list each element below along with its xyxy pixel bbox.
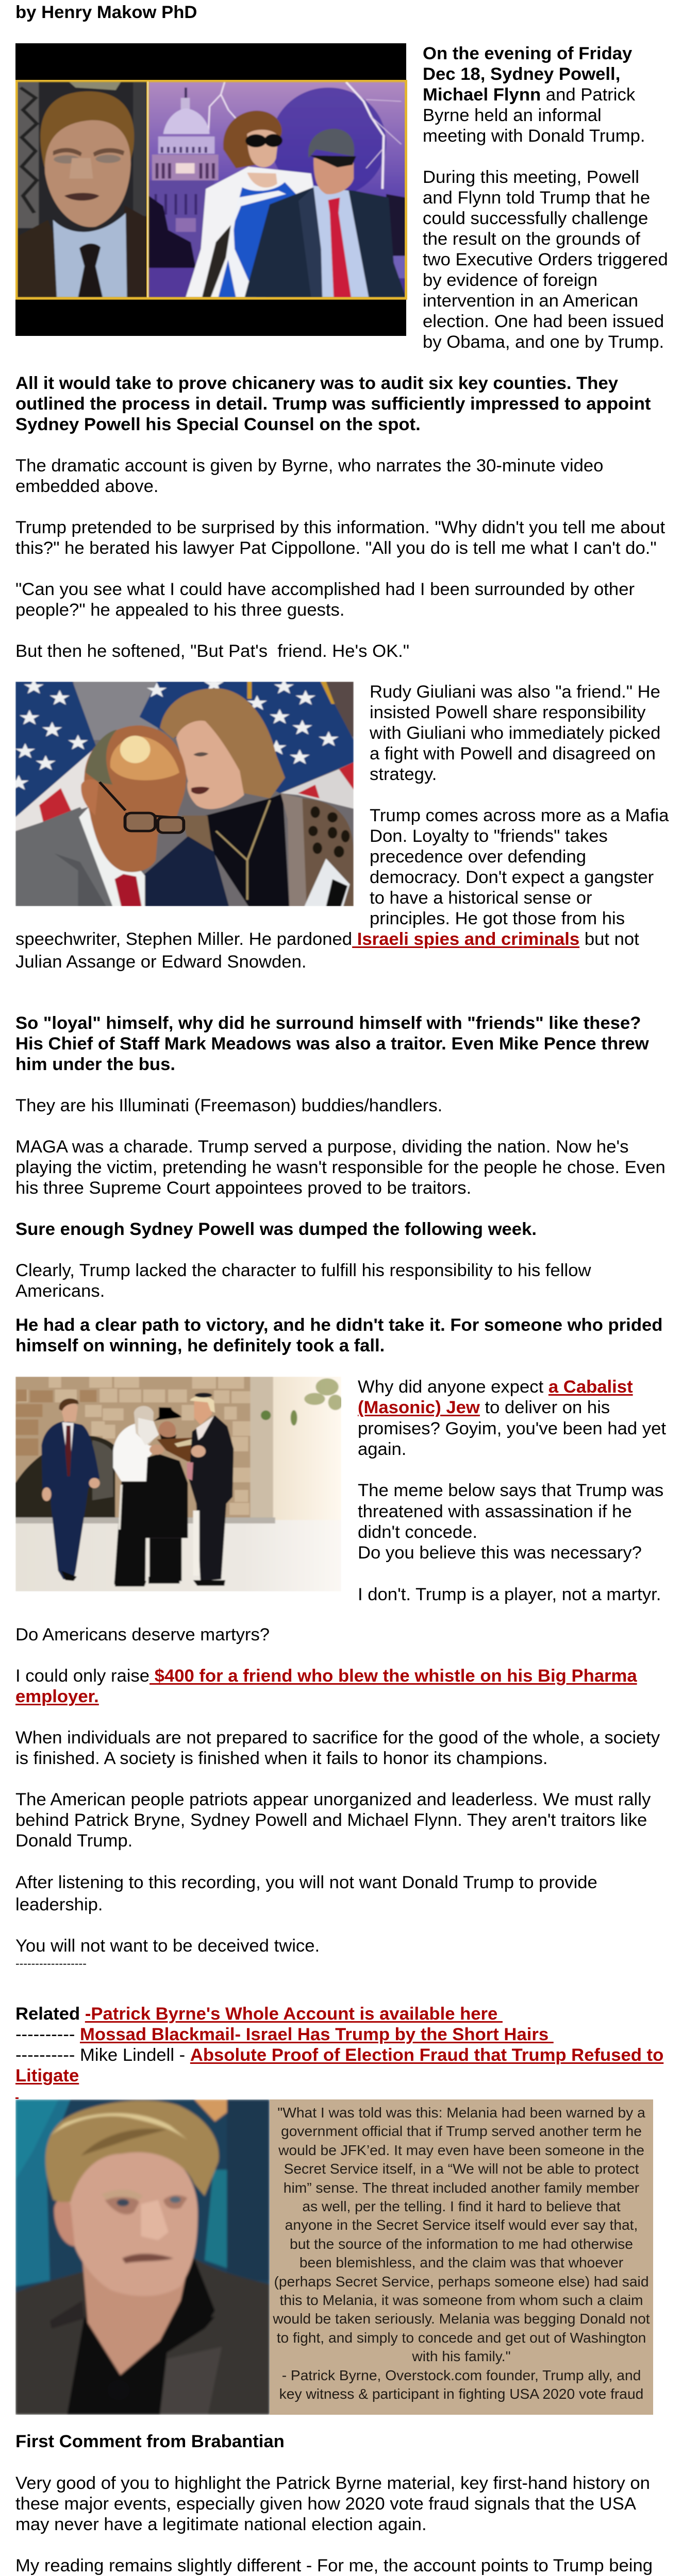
text: right column beside wall image — [358, 1377, 666, 1604]
quote panel: (perhaps Secret Service, perhaps someone else) had said — [274, 2273, 648, 2290]
text: right column beside wall image: didn't concede. — [358, 1522, 477, 1542]
paragraph: Patrick Byrne material — [15, 2473, 650, 2534]
quote panel: him” sense. The threat included another family member — [284, 2179, 639, 2196]
text: right column beside first image: could successfully challenge — [423, 209, 648, 228]
bold paragraph: so loyal himself: So "loyal" himself, why did he surround himself with "friends" like these? — [15, 1013, 641, 1033]
Powell hair — [160, 688, 285, 799]
woman — [223, 111, 282, 168]
paragraph: MAGA was a charade: MAGA was a charade. Trump served a purpose, dividing the nation. Now he's — [15, 1137, 628, 1157]
paragraph: MAGA was a charade: playing the victim, pretending he wasn't responsible for the people he chose. Even — [15, 1158, 666, 1177]
paragraph: dramatic account: The dramatic account is given by Byrne, who narrates the 30-minute video — [15, 456, 603, 476]
paragraph: surrounded by other people: people?" he appealed to his three guests. — [15, 600, 345, 620]
paragraph: Trump pretended: this?" he berated his lawyer Pat Cippollone. "All you do is tell me what I can't do." — [15, 538, 657, 558]
related links: Litigate — [15, 2066, 79, 2086]
image: Patrick Byrne beside Sydney Powell and Michael Flynn — [15, 43, 406, 336]
small underlined mark — [15, 2097, 19, 2099]
paragraph: whistleblower link — [15, 1666, 637, 1706]
text: right column beside Giuliani image: with Giuliani who immediately picked — [370, 723, 660, 743]
jacket — [15, 2258, 270, 2415]
Kushner — [41, 1421, 99, 1579]
text: continuation with pardons link: speechwriter, Stephen Miller. He pardoned Israeli spies and criminals but not — [15, 929, 639, 949]
paragraph: society finished: When individuals are not prepared to sacrifice for the good of the whole, a society — [15, 1728, 660, 1748]
quote panel: been blemishless, and the claim was that whoever — [300, 2254, 623, 2270]
text: right column beside first image: Byrne held an informal — [423, 106, 602, 125]
face — [65, 2148, 198, 2296]
paragraph: Patrick Byrne material: Very good of you to highlight the Patrick Byrne material, key first-hand history on — [15, 2473, 650, 2493]
Giuliani — [15, 807, 117, 906]
paragraph: Patrick Byrne material: may never have a legitimate national election again. — [15, 2515, 427, 2534]
quote panel: "What I was told was this: Melania had been warned by a — [277, 2104, 645, 2121]
paragraph: deceived twice: You will not want to be deceived twice. — [15, 1936, 320, 1956]
photo: Patrick Byrne — [15, 2099, 270, 2415]
man — [245, 187, 406, 297]
text: right column beside wall image: Do you believe this was necessary? — [358, 1543, 642, 1563]
text: right column beside first image: Michael Flynn and Patrick — [423, 85, 635, 105]
related links — [15, 2004, 664, 2086]
text: right column beside wall image: threatened with assassination if he — [358, 1502, 632, 1521]
quote panel: but the source of the information to me had otherwise — [290, 2235, 633, 2252]
paragraph: MAGA was a charade — [15, 1137, 666, 1198]
paragraph: society finished: is finished. A society is finished when it fails to honor its champions. — [15, 1749, 548, 1768]
paragraph: American patriots: Donald Trump. — [15, 1831, 132, 1851]
text: right column beside wall image: Why did anyone expect a Cabalist — [358, 1377, 633, 1397]
hair — [45, 2100, 219, 2202]
text: right column beside first image: by evidence of foreign — [423, 270, 597, 290]
text: right column beside first image: and Flynn told Trump that he — [423, 188, 650, 208]
text: right column beside first image: During this meeting, Powell — [423, 167, 639, 187]
Trump — [189, 1415, 234, 1581]
left panel — [18, 82, 147, 297]
neck — [82, 2260, 189, 2375]
rabbi — [143, 1454, 188, 1538]
quote panel: government official that if Trump served another term he — [281, 2123, 642, 2139]
text: right column beside Giuliani image: a fight with Powell and disagreed on — [370, 744, 656, 764]
paragraph: Trump lacked character: Americans. — [15, 1281, 105, 1301]
paragraph: whistleblower link: I could only raise $400 for a friend who blew the whistle on his Big Pharma — [15, 1666, 637, 1686]
text: right column beside first image: election. One had been issued — [423, 312, 664, 331]
bold paragraph: clear path to victory: He had a clear path to victory, and he didn't take it. For someone who prided — [15, 1315, 662, 1335]
heading: first comment: First Comment from Brabantian — [15, 2432, 285, 2451]
black shirt — [67, 2317, 215, 2415]
quote panel: this to Melania, it was someone from whom such a claim — [280, 2292, 643, 2308]
text: right column beside Giuliani image: Rudy Giuliani was also "a friend." He — [370, 682, 660, 702]
bold paragraph: clear path to victory: himself on winning, he definitely took a fall. — [15, 1336, 385, 1355]
bold paragraph: clear path to victory — [15, 1315, 662, 1355]
text: right column beside Giuliani image: to have a historical sense or — [370, 888, 592, 908]
related links: ---------- Mossad Blackmail- Israel Has Trump by the Short Hairs — [15, 2025, 548, 2044]
text: right column beside first image: meeting with Donald Trump. — [423, 126, 645, 146]
text: right column beside first image: intervention in an American — [423, 291, 638, 311]
text: Assange and Snowden: Julian Assange or Edward Snowden. — [15, 952, 306, 972]
paragraph: whistleblower link: employer. — [15, 1687, 99, 1706]
quote panel: key witness & participant in fighting USA 2020 vote fraud — [279, 2385, 643, 2402]
paragraph: society finished — [15, 1728, 660, 1768]
bold paragraph: so loyal himself: His Chief of Staff Mark Meadows was also a traitor. Even Mike Pence threw — [15, 1034, 649, 1054]
quote panel — [270, 2099, 653, 2415]
text: right column beside first image: two Executive Orders triggered — [423, 250, 668, 269]
text: right column beside Giuliani image — [370, 682, 669, 928]
paragraph: American patriots: behind Patrick Bryne, Sydney Powell and Michael Flynn. They aren't traitors like — [15, 1810, 647, 1830]
text: right column beside wall image: again. — [358, 1439, 406, 1459]
paragraph: MAGA was a charade: his three Supreme Court appointees proved to be traitors. — [15, 1178, 471, 1198]
text: right column beside Giuliani image: principles. He got those from his — [370, 909, 625, 928]
bold paragraph: audit six key counties: All it would take to prove chicanery was to audit six key counties. They — [15, 374, 618, 393]
paragraph: martyrs: Do Americans deserve martyrs? — [15, 1625, 270, 1645]
text: right column beside first image: On the evening of Friday — [423, 44, 632, 63]
text: right column beside wall image: (Masonic) Jew to deliver on his — [358, 1398, 610, 1417]
bold paragraph: Powell dumped: Sure enough Sydney Powell was dumped the following week. — [15, 1219, 537, 1239]
text: right column beside wall image: promises? Goyim, you've been had yet — [358, 1419, 666, 1438]
paragraph: surrounded by other people — [15, 580, 635, 620]
paragraph: Trump pretended — [15, 518, 665, 558]
quote panel: - Patrick Byrne, Overstock.com founder, Trump ally, and — [282, 2367, 641, 2383]
white-shirted man — [113, 1423, 159, 1481]
text: right column beside Giuliani image: precedence over defending — [370, 847, 586, 867]
bold paragraph: so loyal himself: him under the bus. — [15, 1055, 175, 1074]
quote panel: as well, per the telling. I find it hard to believe that — [302, 2198, 621, 2214]
text: right column beside first image: the result on the grounds of — [423, 229, 640, 249]
bold paragraph: audit six key counties: Sydney Powell his Special Counsel on the spot. — [15, 415, 421, 434]
image: Giuliani and Powell before flags — [15, 682, 354, 906]
quote panel: anyone in the Secret Service itself would ever say that, — [285, 2216, 638, 2233]
paragraph: American patriots: The American people patriots appear unorganized and leaderless. We must rally — [15, 1790, 651, 1809]
quote panel: with his family." — [412, 2348, 511, 2364]
paragraph: dramatic account: embedded above. — [15, 477, 158, 496]
image: Patrick Byrne with quote panel — [15, 2099, 653, 2415]
byline: by Henry Makow PhD — [15, 3, 197, 22]
bold paragraph: so loyal himself — [15, 1013, 649, 1074]
paragraph: Trump lacked character — [15, 1261, 591, 1301]
paragraph: after listening: After listening to this recording, you will not want Donald Trump to provide — [15, 1873, 597, 1892]
image: four men at the stone wall — [15, 1377, 341, 1591]
bold paragraph: audit six key counties — [15, 374, 651, 434]
book — [157, 1437, 204, 1462]
quote panel: would be JFK’ed. It may even have been someone in the — [278, 2142, 644, 2158]
quote panel: would be taken seriously. Melania was begging Donald not — [273, 2310, 650, 2327]
paragraph: surrounded by other people: "Can you see what I could have accomplished had I been surrounded by other — [15, 580, 635, 599]
quote panel: Secret Service itself, in a “We will not be able to protect — [284, 2160, 639, 2177]
quote panel: to fight, and simply to concede and get out of Washington — [277, 2329, 646, 2346]
text: right column beside Giuliani image: Don. Loyalty to "friends" takes — [370, 826, 608, 846]
bold paragraph: audit six key counties: outlined the process in detail. Trump was sufficiently impressed to appoint — [15, 394, 651, 414]
dashed separator: ------------------ — [15, 1957, 87, 1970]
paragraph: Patrick Byrne material: these major events, especially given how 2020 vote fraud signals that the USA — [15, 2494, 636, 2514]
paragraph: dramatic account — [15, 456, 603, 496]
text: right column beside wall image: The meme below says that Trump was — [358, 1481, 663, 1500]
text: right column beside first image — [423, 44, 668, 352]
paragraph: American patriots — [15, 1790, 651, 1851]
paragraph: he softened: But then he softened, "But Pat's friend. He's OK." — [15, 641, 409, 661]
paragraph: Trump pretended: Trump pretended to be surprised by this information. "Why didn't you tell me about — [15, 518, 665, 537]
text: right column beside Giuliani image: strategy. — [370, 765, 437, 784]
text: right column beside first image: by Obama, and one by Trump. — [423, 332, 664, 352]
text: right column beside Giuliani image: democracy. Don't expect a gangster — [370, 868, 654, 887]
text: right column beside first image: Dec 18, Sydney Powell, — [423, 64, 620, 84]
paragraph: blackmailed from the beginning: My reading remains slightly different - For me, the account points to Trump being — [15, 2556, 653, 2575]
text: right column beside wall image: I don't. Trump is a player, not a martyr. — [358, 1585, 661, 1604]
paragraph: Illuminati handlers: They are his Illuminati (Freemason) buddies/handlers. — [15, 1096, 442, 1115]
Powell body — [205, 793, 289, 906]
paragraph end: leadership: leadership. — [15, 1895, 103, 1914]
paragraph: Trump lacked character: Clearly, Trump lacked the character to fulfill his responsibility to his fellow — [15, 1261, 591, 1280]
related links: Related -Patrick Byrne's Whole Account is available here — [15, 2004, 497, 2024]
text: right column beside Giuliani image: insisted Powell share responsibility — [370, 703, 645, 722]
right panel — [149, 82, 406, 297]
related links: ---------- Mike Lindell - Absolute Proof of Election Fraud that Trump Refused to — [15, 2045, 663, 2065]
text: right column beside Giuliani image: Trump comes across more as a Mafia — [370, 806, 669, 825]
